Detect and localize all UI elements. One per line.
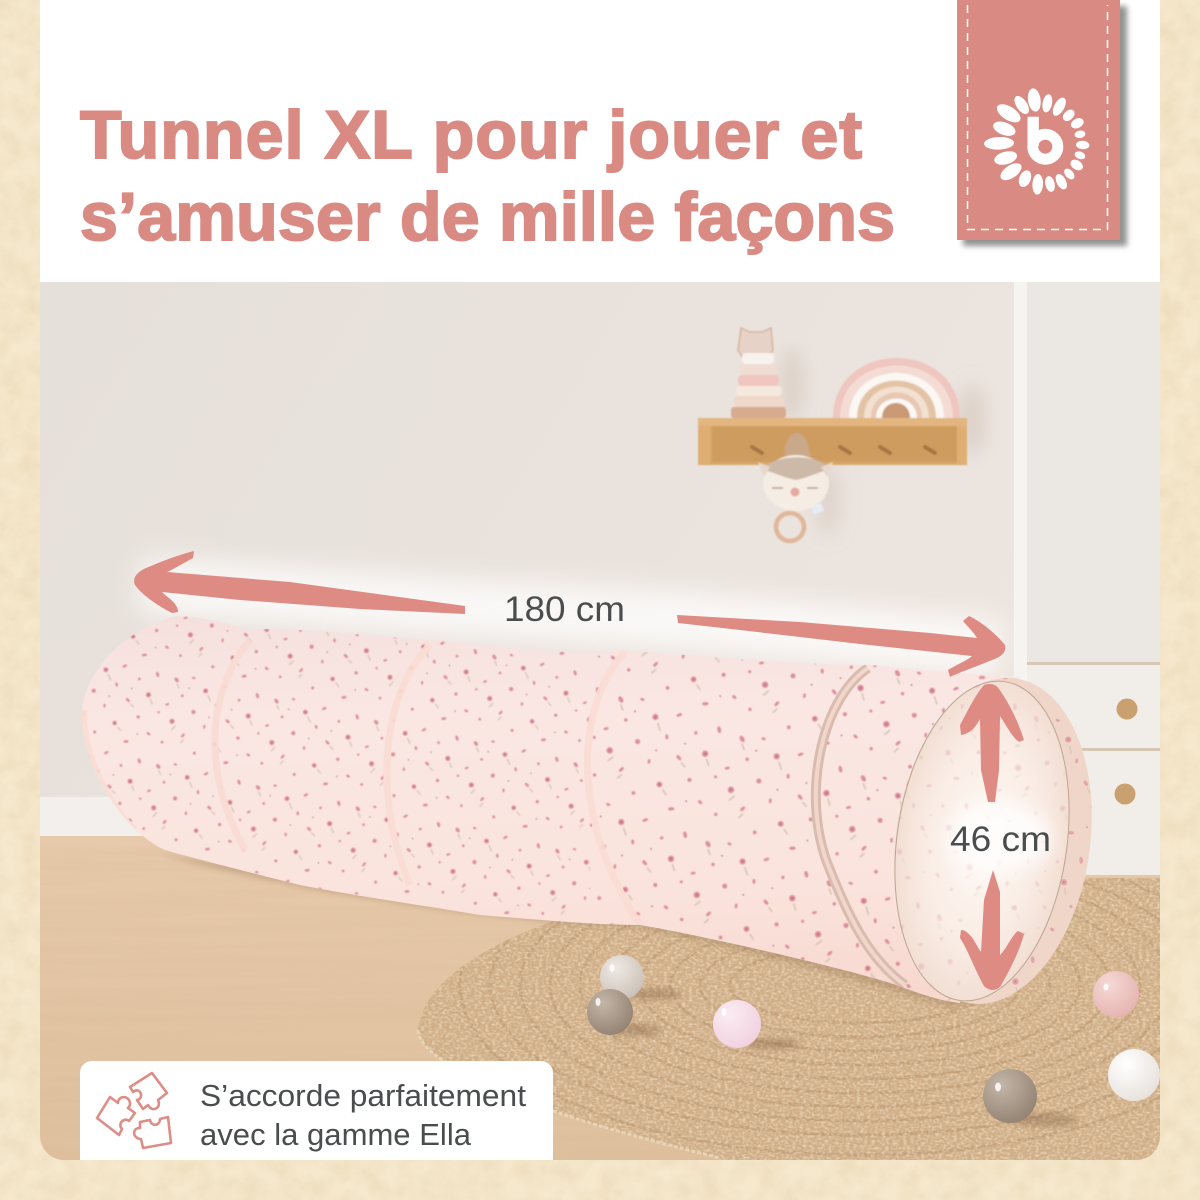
title: Tunnel XL pour jouer et: [80, 97, 862, 173]
title: s’amuser de mille façons: [80, 179, 895, 255]
icon: brand sunflower logo: [984, 88, 1090, 195]
wooden shelf with toys: [698, 328, 967, 541]
glow behind 46 cm: [948, 804, 1052, 872]
plush owl rattle: [758, 433, 833, 541]
stacking toy: [731, 328, 786, 418]
arrow: diameter up: [960, 684, 1024, 802]
callout text: [200, 1078, 526, 1152]
tunnel shadow: [160, 855, 1010, 1008]
jute rug: [416, 878, 1160, 1160]
label: 180 cm: 180 cm: [504, 590, 625, 629]
white glow behind dimensions: [140, 585, 1000, 648]
shelf: [698, 418, 967, 465]
label: 46 cm: 46 cm: [950, 820, 1051, 859]
callout text: avec la gamme Ella: [200, 1117, 472, 1152]
baseboard: [40, 797, 150, 837]
wall shadows behind shelf items: [780, 347, 986, 536]
tunnel hoops: [84, 640, 640, 925]
arrow: length left: [134, 551, 465, 614]
floral pop-up tunnel: [82, 616, 1092, 1004]
white header band: [40, 0, 1160, 282]
rainbow toy: [833, 358, 960, 418]
tunnel end opening face: [894, 680, 1070, 1002]
wooden floor: [40, 836, 1160, 1166]
callout: range compatibility: [80, 1061, 553, 1160]
arrow: length right: [677, 615, 1005, 677]
icon: puzzle pieces: [97, 1073, 171, 1148]
callout text: S’accorde parfaitement: [200, 1078, 526, 1113]
photo scene: [40, 282, 1200, 1170]
tunnel end opening rim: [894, 678, 1092, 1004]
play balls: [587, 955, 1160, 1127]
wall: [40, 282, 1014, 797]
title: [80, 97, 895, 255]
brand tag with stitched border: [957, 0, 1127, 246]
white cabinet: [1014, 282, 1160, 875]
arrow: diameter down: [960, 870, 1024, 990]
